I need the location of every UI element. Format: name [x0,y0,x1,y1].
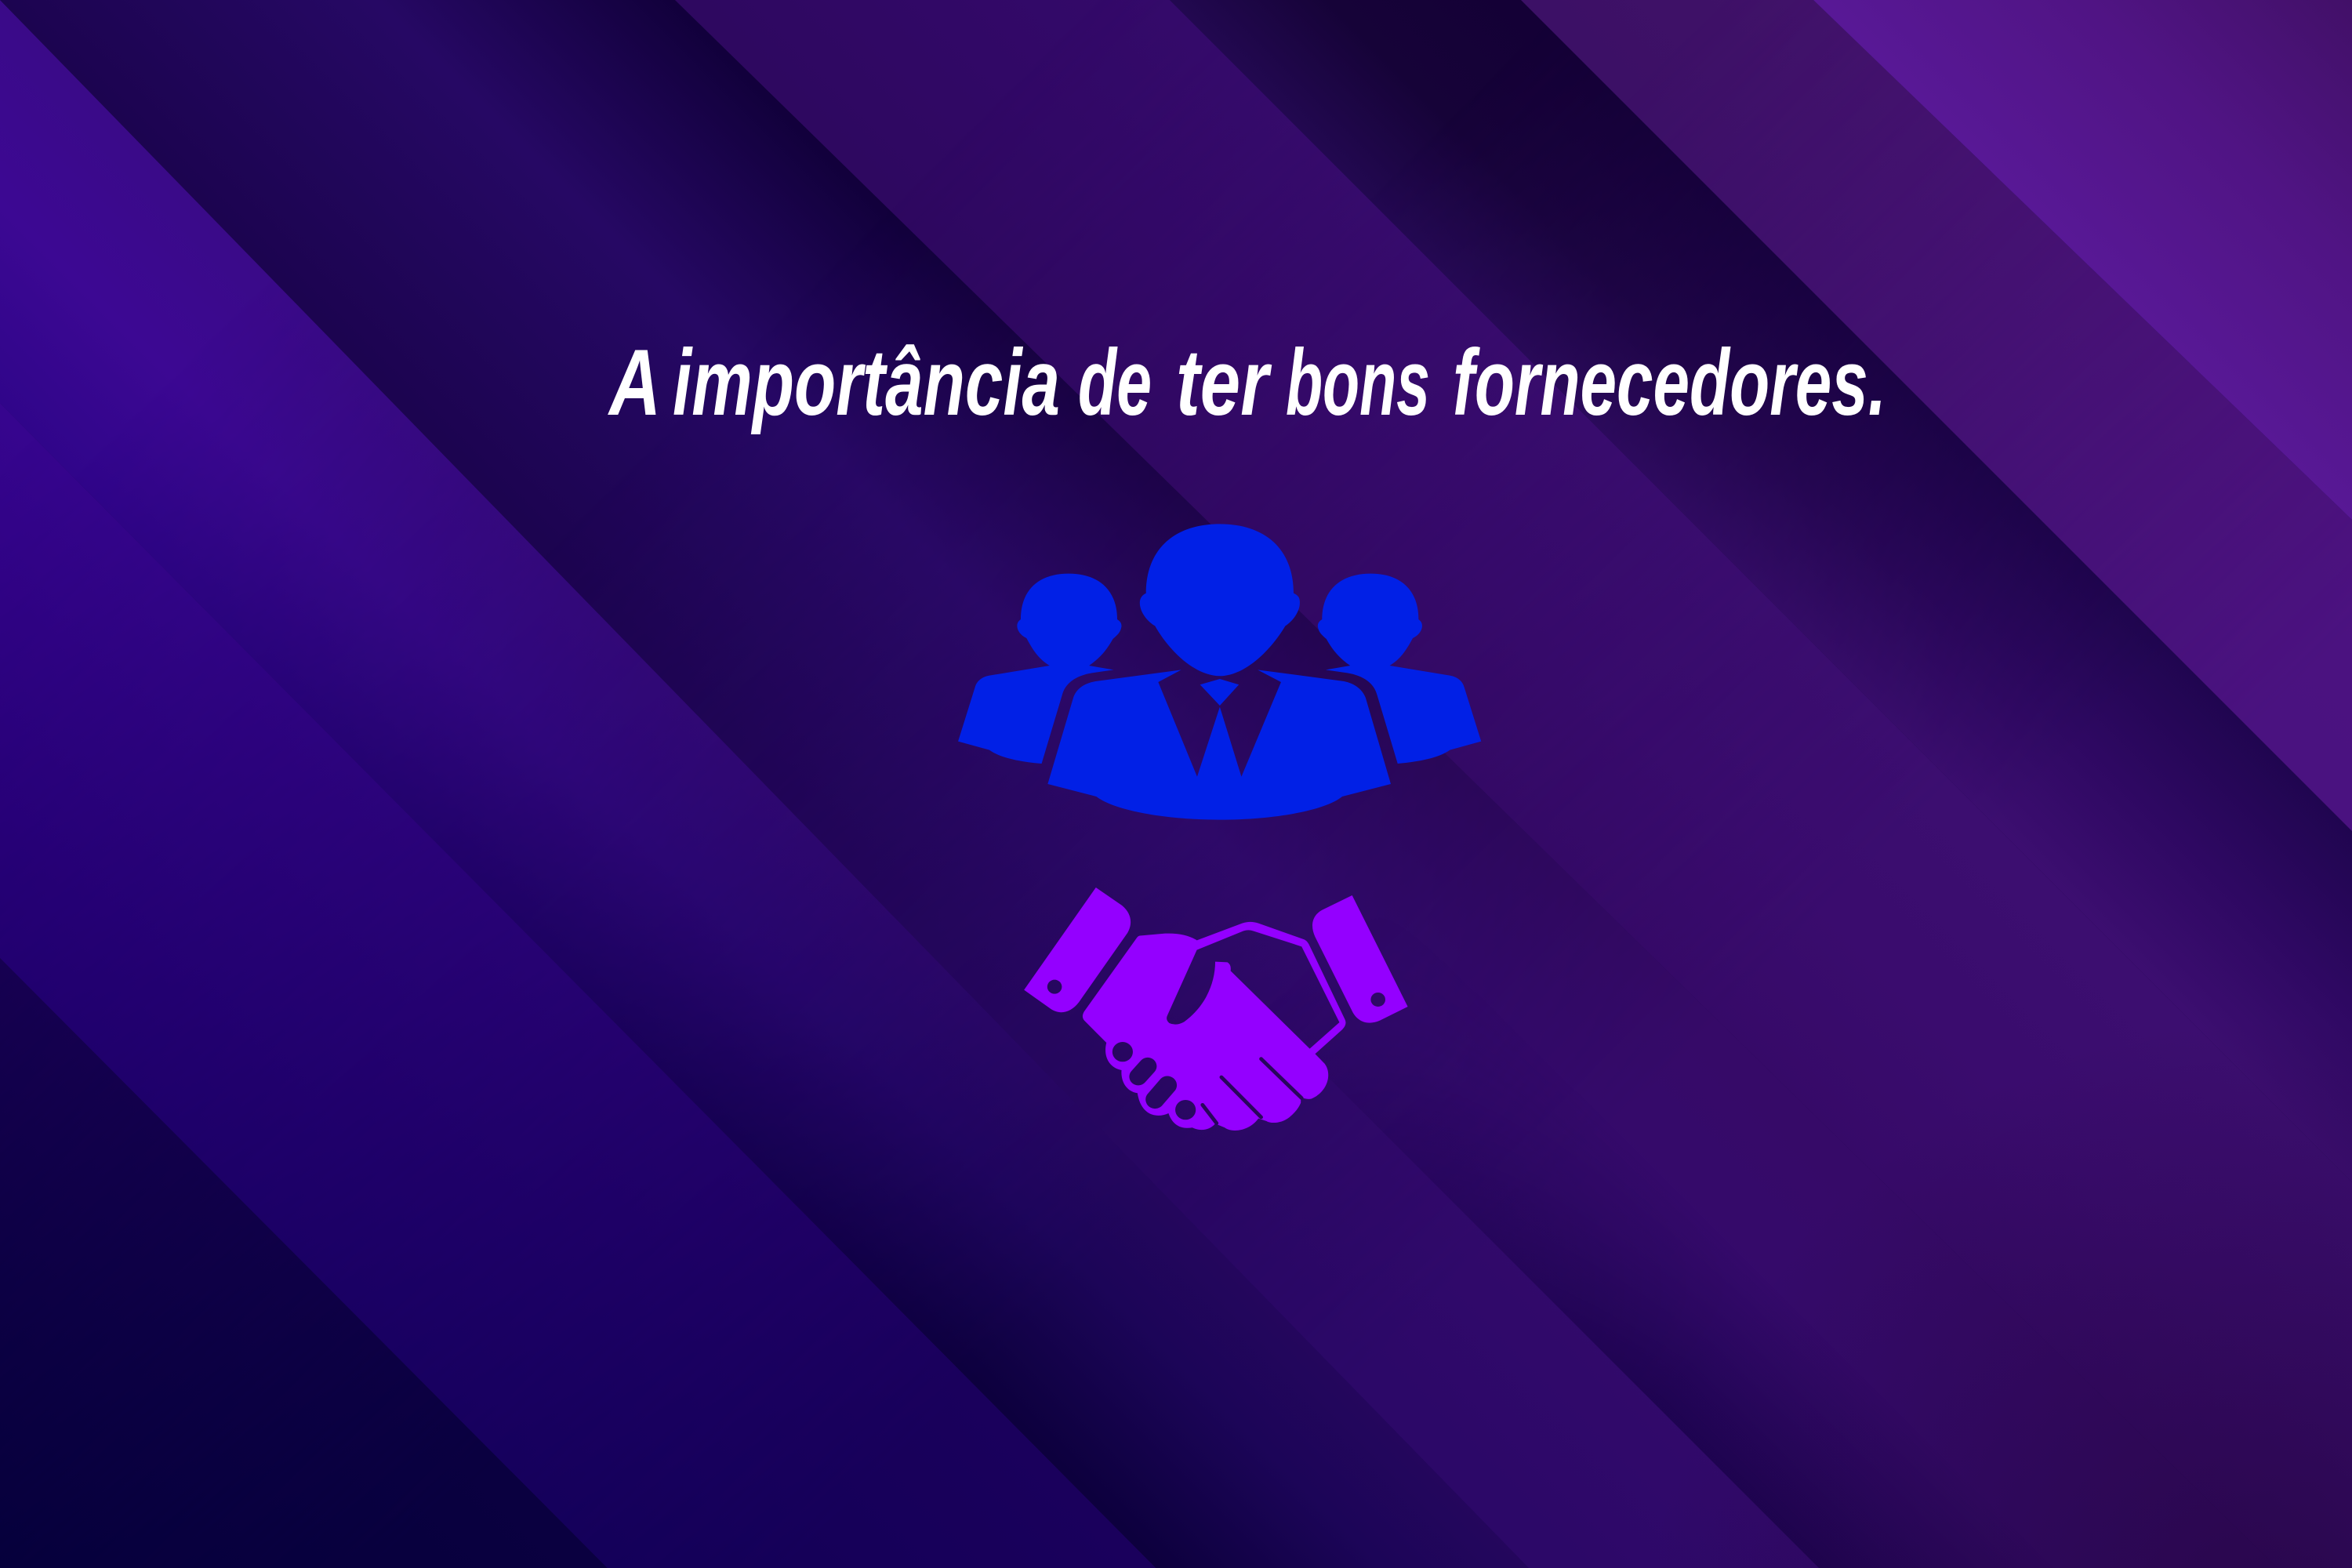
title: importância [673,330,1060,435]
icon: centre person [1047,524,1391,820]
icon: left cuff [1024,887,1131,1012]
icon: right cuff [1312,895,1408,1023]
icon: handshake [1024,887,1408,1131]
title: fornecedores. [1453,330,1886,435]
icon: right person [1318,574,1481,764]
title: de [1078,330,1152,435]
icon: left person [958,574,1122,764]
title: bons [1286,330,1430,435]
icon: finger gaps [1203,1059,1301,1123]
title: A [608,330,661,435]
title [608,330,1886,435]
title: ter [1176,330,1272,435]
icon: group of three business people [958,524,1481,820]
icon: clasped hands [1083,922,1345,1131]
